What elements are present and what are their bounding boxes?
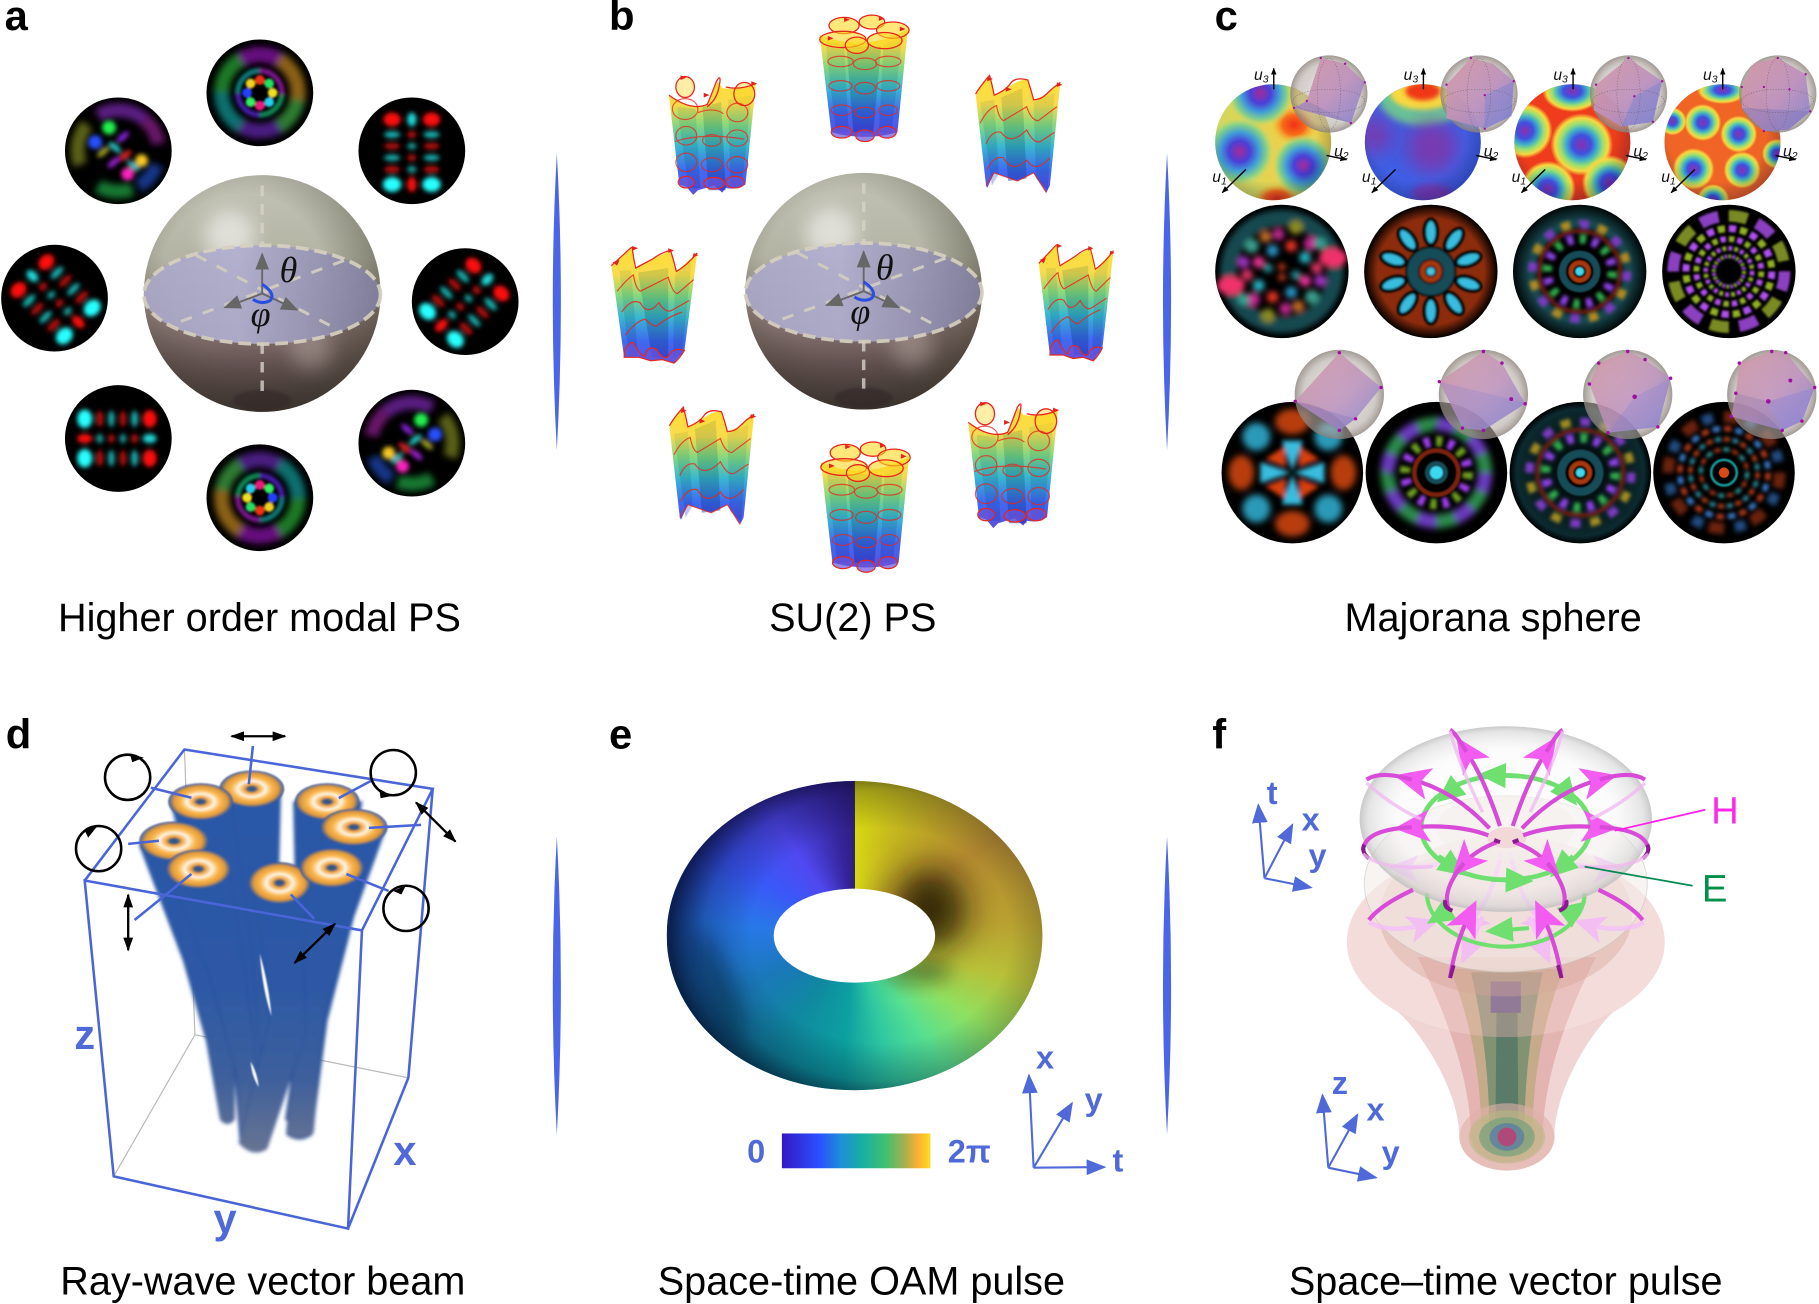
colour bar (747, 1133, 991, 1169)
polyhedron 4 (1739, 55, 1816, 133)
panel letter f: f (1212, 710, 1226, 757)
colour bar: 0 (747, 1133, 765, 1169)
disc row 3 #2 (1366, 402, 1507, 543)
mode disc lower left (65, 385, 172, 492)
caption c: Majorana sphere (1345, 596, 1642, 640)
axis labels on colour spheres: u (1212, 169, 1221, 186)
polyhedron row 3 #3 (1583, 350, 1672, 439)
disc row 3 #4 (1653, 402, 1795, 543)
circular polarization icons (76, 750, 429, 931)
mode disc lower right (358, 390, 465, 497)
caption b: SU(2) PS (769, 596, 936, 640)
dark field line ends (1363, 840, 1648, 978)
theta label: θ (876, 248, 894, 288)
polyhedron row 3 #1 (1293, 350, 1384, 439)
axis labels on colour spheres: 2 (1641, 151, 1648, 162)
polyhedron 1 (1290, 55, 1367, 133)
axis labels on colour spheres: 1 (1371, 176, 1376, 187)
axis labels on colour spheres: 3 (1712, 74, 1718, 85)
colour sphere 4 (1664, 84, 1780, 200)
axes f top (1258, 775, 1327, 888)
H label and leader: H (1711, 790, 1739, 833)
beam stack top (820, 15, 909, 142)
lower grey lobe (1364, 796, 1647, 972)
axes f bottom: y (1382, 1135, 1400, 1171)
donut beam ends (139, 770, 387, 904)
mode disc left (0, 223, 130, 374)
panel letter d: d (6, 710, 31, 757)
disc row 2 #2 (1364, 205, 1498, 338)
axis labels on colour spheres: u (1484, 144, 1492, 161)
H label and leader (1615, 790, 1739, 833)
beam stack lower left (669, 407, 756, 524)
axis labels on colour spheres: u (1783, 144, 1792, 161)
polyhedron 2 (1440, 55, 1518, 133)
caption a: Higher order modal PS (58, 596, 461, 640)
linear polarization arrows (128, 736, 455, 963)
axes f bottom: x (1367, 1092, 1385, 1128)
upper green ring (E field) (1421, 775, 1590, 881)
pale return lobes (1363, 731, 1648, 867)
disc row 2 #4 (1662, 205, 1796, 338)
panel f: space-time vector pulse (1258, 726, 1739, 1178)
axis labels on colour spheres: 1 (1221, 176, 1227, 187)
axes e: y (1085, 1081, 1103, 1117)
polyhedron row 3 #2 (1438, 350, 1528, 439)
axis labels on colour spheres: u (1362, 169, 1371, 186)
panel b: SU(2) Poincaré sphere (611, 15, 1115, 572)
colour bar: 2π (948, 1133, 991, 1169)
pink envelope ellipses (1347, 847, 1665, 1037)
mode disc top (206, 39, 313, 146)
axis labels on colour spheres: u (1512, 169, 1520, 186)
gaps between tubes (251, 954, 271, 1087)
axis labels on colour spheres: u (1633, 144, 1642, 161)
axis labels on colour spheres: u (1661, 169, 1670, 186)
colour sphere 2 (1364, 84, 1481, 200)
axis labels on colour spheres: 3 (1263, 74, 1269, 85)
axis labels on colour spheres: 1 (1670, 176, 1676, 187)
axes e: x (1036, 1039, 1054, 1075)
wireframe box front edges (85, 749, 433, 1229)
divider lens e (1163, 836, 1171, 1135)
beam stack upper left (669, 75, 757, 195)
axis labels on colour spheres: 1 (1520, 176, 1526, 187)
divider lens d (553, 836, 561, 1135)
axes f top: t (1267, 775, 1278, 811)
beam stack right (1039, 244, 1115, 361)
wireframe box back edges (114, 749, 408, 1176)
colour sphere 3 (1514, 84, 1630, 200)
axis labels on colour spheres: u (1254, 67, 1263, 84)
panel d: ray-wave vector beam: x (393, 1127, 416, 1174)
phi label: φ (850, 292, 870, 332)
beam stack lower right (968, 401, 1059, 528)
polyhedron 3 (1590, 55, 1667, 133)
axis labels on colour spheres: 3 (1412, 74, 1418, 85)
axis labels on colour spheres (1212, 67, 1798, 193)
panel e: space-time OAM pulse (667, 777, 1124, 1179)
axes f top: x (1302, 802, 1320, 838)
panel d: ray-wave vector beam (74, 736, 455, 1242)
central sphere a (144, 175, 381, 412)
mode disc upper right (358, 97, 465, 204)
disc row 2 #1 (1215, 205, 1349, 338)
blue leader lines (128, 746, 421, 920)
E label and leader (1585, 867, 1727, 910)
E label and leader: E (1702, 867, 1727, 910)
axes f bottom (1322, 1065, 1400, 1178)
polyhedron row 3 #4 (1727, 350, 1816, 439)
theta label: θ (280, 250, 297, 290)
axis labels on colour spheres: 3 (1562, 74, 1568, 85)
beam tubes (139, 789, 386, 1152)
disc row 3 #3 (1510, 402, 1651, 543)
mode disc right (390, 226, 541, 377)
axis labels on colour spheres: 2 (1491, 151, 1498, 162)
central sphere b (745, 173, 982, 410)
divider lens b (1163, 153, 1171, 450)
axis labels on colour spheres: u (1334, 144, 1343, 161)
axes e: t (1113, 1143, 1124, 1179)
axis labels on colour spheres: 2 (1342, 151, 1349, 162)
torus hole edge (774, 889, 935, 983)
caption d: Ray-wave vector beam (60, 1260, 465, 1304)
pale back arrows (1369, 843, 1644, 958)
beam stack left (611, 246, 698, 363)
axes f bottom: z (1332, 1065, 1348, 1101)
panel letter e: e (609, 710, 632, 757)
axes f top: y (1309, 838, 1327, 874)
panel c: Majorana sphere (1205, 55, 1816, 543)
caption e: Space-time OAM pulse (658, 1260, 1065, 1304)
panel a: higher order modal Poincaré sphere (0, 39, 541, 551)
axis labels on colour spheres: 2 (1791, 151, 1798, 162)
mode disc bottom (206, 444, 313, 551)
caption f: Space–time vector pulse (1289, 1260, 1723, 1304)
axis labels d: z (74, 1011, 95, 1058)
axis labels on colour spheres: u (1404, 67, 1412, 84)
torus (667, 777, 1043, 1091)
axis labels on colour spheres: u (1703, 67, 1712, 84)
phi label: φ (251, 294, 270, 334)
beam stack upper right (976, 75, 1063, 193)
lower green ring (E field) (1427, 893, 1585, 947)
divider lens a (553, 153, 561, 450)
funnel layers (1398, 957, 1614, 1171)
beam stack bottom (821, 442, 910, 572)
disc row 2 #3 (1513, 205, 1646, 338)
disc row 3 #1 (1222, 402, 1363, 543)
upper grey lobe (1360, 726, 1652, 912)
hub of the field lines (1487, 827, 1527, 848)
panel d: ray-wave vector beam: y (213, 1195, 237, 1242)
colour sphere 1 (1215, 84, 1332, 200)
magenta H field arrows (1363, 730, 1648, 978)
mode disc upper left (65, 97, 172, 204)
axes e (1029, 1039, 1124, 1179)
axis labels on colour spheres: u (1553, 67, 1562, 84)
